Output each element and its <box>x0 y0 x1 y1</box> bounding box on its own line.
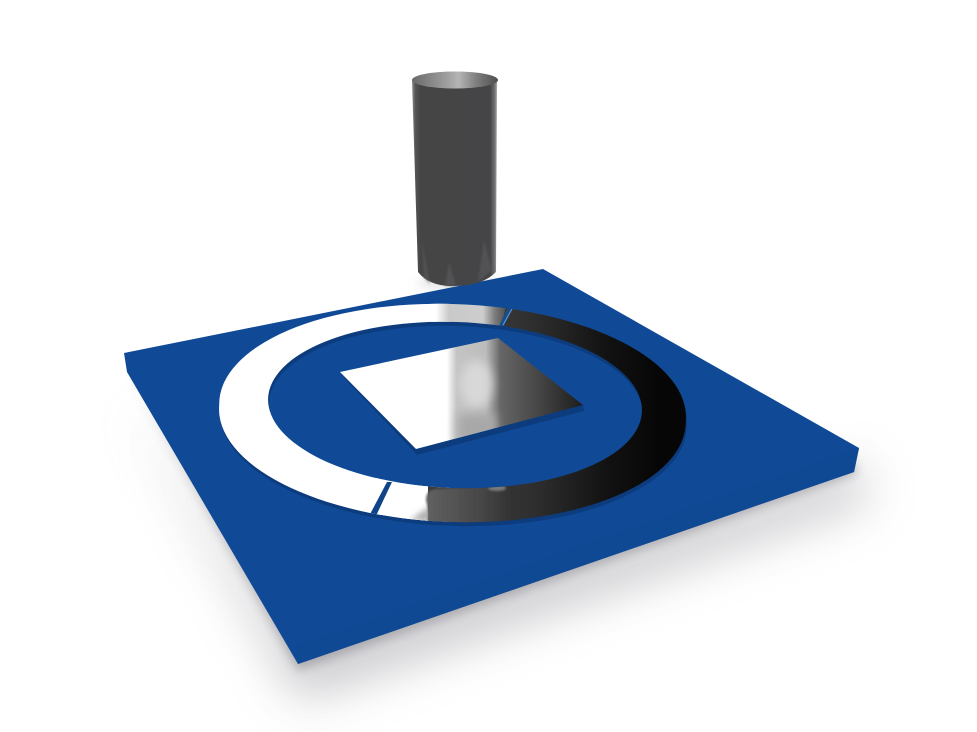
cylinder bottom glints <box>422 240 492 286</box>
ring: light glint <box>488 485 506 491</box>
ring: gap bottom <box>370 482 392 514</box>
plate shading, lower edge <box>296 448 859 664</box>
ring: dark right segment <box>428 350 686 522</box>
blue plate <box>124 269 859 664</box>
ring: white to black reflective segments <box>219 304 686 522</box>
ring: gap top <box>499 308 512 326</box>
square shadow edge <box>340 372 584 455</box>
ring groove shadow <box>220 308 687 526</box>
ring: soft grey near bottom reflection <box>410 506 430 522</box>
plate cast shadow <box>128 372 870 700</box>
ring: white left segment <box>219 304 450 522</box>
cylinder shadow on background <box>417 277 497 289</box>
reflective square <box>340 338 583 449</box>
cylinder body <box>412 80 497 286</box>
cylinder top ellipse <box>412 72 498 88</box>
square: light reflection blob <box>460 360 492 408</box>
ring: top reflection of cylinder <box>430 304 506 326</box>
ring: dark upper right segment <box>500 308 644 355</box>
ring: grey bottom reflection <box>424 484 520 522</box>
ring: white bottom segment <box>360 478 428 521</box>
illustration: 3D plate with ring, square and cylinder <box>124 72 880 714</box>
cylinder <box>412 72 498 286</box>
square: grey lower band <box>458 414 496 444</box>
